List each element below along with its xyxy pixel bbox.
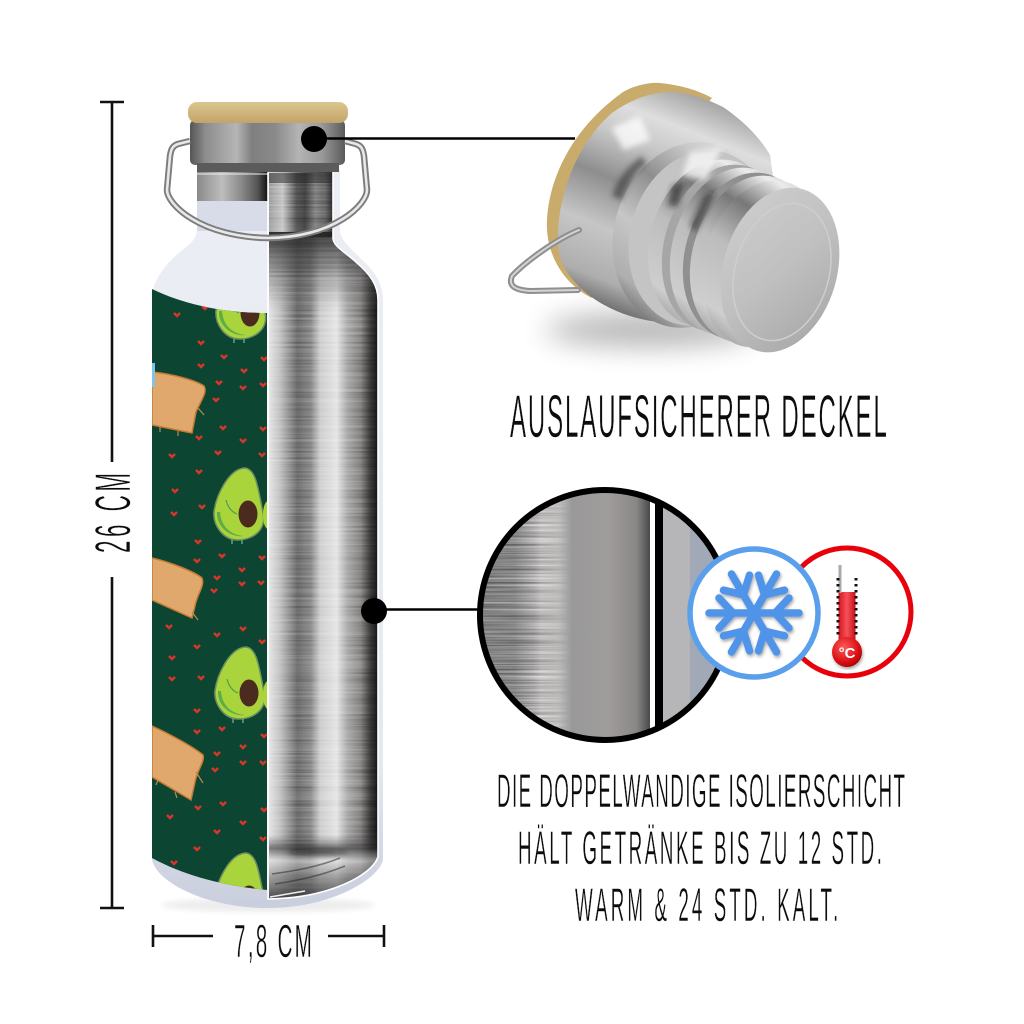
steel cap body — [558, 92, 782, 323]
bamboo disc — [547, 83, 712, 298]
description text: HÄLT GETRÄNKE BIS ZU 12 STD. — [518, 822, 882, 875]
description text: DIE DOPPELWANDIGE ISOLIERSCHICHT — [497, 765, 905, 818]
neck metal thread window — [197, 172, 268, 231]
icon: cold, snowflake in blue circle — [690, 549, 818, 677]
bottle drop shadow — [160, 898, 376, 912]
wire loop — [511, 230, 579, 291]
ground shadow — [545, 314, 755, 346]
lid: bamboo top and steel collar — [188, 102, 348, 172]
dimension: height 26 cm — [86, 102, 142, 908]
highlights and groove shadows on the cap — [612, 116, 722, 232]
icon: hot, thermometer in red circle: °C — [839, 645, 856, 662]
right half: stainless steel inner wall — [269, 171, 379, 901]
carrying handle — [167, 141, 367, 238]
cap end face — [702, 174, 858, 366]
callout dot and line: lid — [301, 126, 575, 152]
heading: leak-proof lid: AUSLAUFSICHERER DECKEL — [510, 383, 887, 450]
icon: hot, thermometer in red circle — [783, 548, 911, 676]
description text — [497, 765, 905, 932]
left half: printed pattern — [152, 289, 267, 890]
dimension: width 7,8 cm: 7,8 CM — [234, 916, 312, 967]
bottle white body — [152, 170, 383, 908]
hearts — [166, 306, 267, 864]
dimension: height 26 cm: 26 CM — [86, 473, 142, 553]
sealing ring and grooves — [591, 124, 845, 362]
product photo: steel lid — [511, 83, 858, 366]
infographic canvas — [95, 82, 914, 963]
bottle — [150, 102, 383, 929]
steel section outline — [268, 171, 378, 899]
toast characters — [152, 363, 205, 800]
avocado characters — [213, 308, 267, 890]
dimension: width 7,8 cm — [152, 916, 385, 967]
description text: WARM & 24 STD. KALT. — [575, 879, 838, 932]
magnified wall circle — [478, 488, 735, 742]
callout dot and line: wall — [361, 598, 480, 624]
